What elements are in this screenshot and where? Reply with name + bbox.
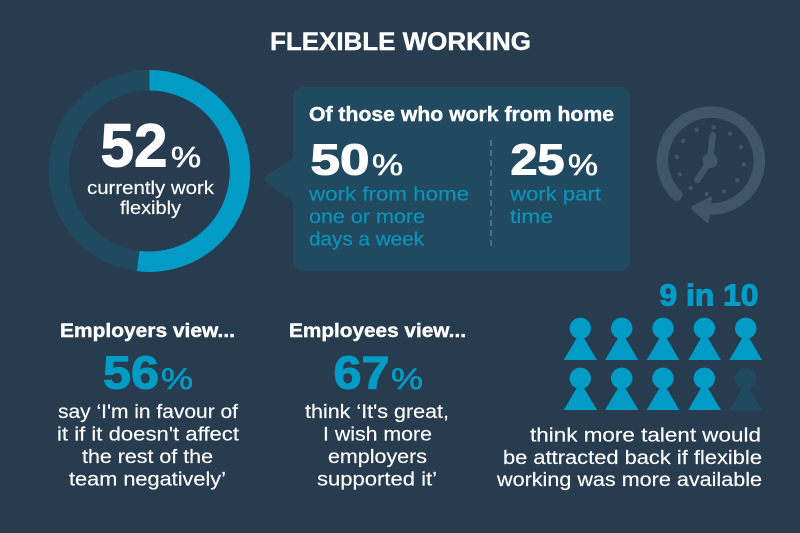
talent caption: [496, 426, 762, 491]
stat: 25%: time: [510, 207, 553, 228]
stat: 50%: 50: [310, 136, 370, 184]
donut caption: flexibly: [120, 198, 181, 218]
employers quote: the rest of the: [82, 447, 213, 468]
donut caption: currently work: [87, 178, 215, 198]
employees quote: think ‘It's great,: [305, 402, 449, 423]
donut chart: 52% currently work flexibly: [59, 80, 240, 262]
employers quote: [57, 402, 240, 490]
panel: of those who work from home: [264, 87, 630, 271]
stat: 50%: %: [372, 149, 403, 182]
employees view: [289, 320, 466, 490]
employers quote: say ‘I'm in favour of: [58, 402, 239, 423]
employees stat: 67%: 67: [334, 346, 390, 398]
talent caption: think more talent would: [530, 426, 761, 446]
employers quote: it if it doesn't affect: [57, 424, 240, 446]
title: FLEXIBLE WORKING: [270, 28, 531, 56]
9 in 10 stat: 9 in 10: [660, 278, 758, 312]
employers stat: 56%: 56: [103, 346, 159, 398]
employees quote: I wish more: [323, 424, 432, 446]
stat: 50%: work from home: [308, 184, 469, 206]
donut caption: [87, 178, 215, 218]
employers stat: 56%: %: [161, 363, 193, 396]
stat: 50%: [308, 136, 469, 250]
employers stat: 56%: [103, 346, 193, 398]
panel heading: Of those who work from home: [309, 104, 614, 126]
stat: 25%: [509, 136, 602, 228]
stat: 50%: days a week: [309, 230, 425, 250]
employees quote: employers: [328, 447, 427, 468]
stat: 25%: %: [568, 149, 598, 182]
employees quote: supported it’: [317, 470, 437, 490]
donut value: 52: [100, 112, 168, 180]
employees stat: 67%: %: [391, 363, 423, 396]
donut value arc: [138, 80, 240, 262]
stat: 25%: work part: [509, 184, 602, 206]
employers quote: team negatively’: [69, 470, 226, 490]
employers heading: Employers view...: [60, 320, 235, 342]
stat: 25%: 25: [510, 136, 564, 184]
talent caption: working was more available: [496, 470, 762, 491]
employees stat: 67%: [334, 346, 423, 398]
panel background with pointer: [264, 87, 630, 271]
icon: clock with circular arrow: [662, 112, 759, 223]
donut percent sign: %: [171, 142, 201, 174]
employees quote: [305, 402, 449, 490]
pictogram: 9 of 10 people: [564, 318, 762, 410]
donut track: [59, 80, 240, 262]
stat: 50%: one or more: [309, 207, 425, 228]
talent caption: be attracted back if flexible: [503, 448, 762, 469]
employers view: [57, 320, 240, 490]
employees heading: Employees view...: [289, 320, 466, 342]
